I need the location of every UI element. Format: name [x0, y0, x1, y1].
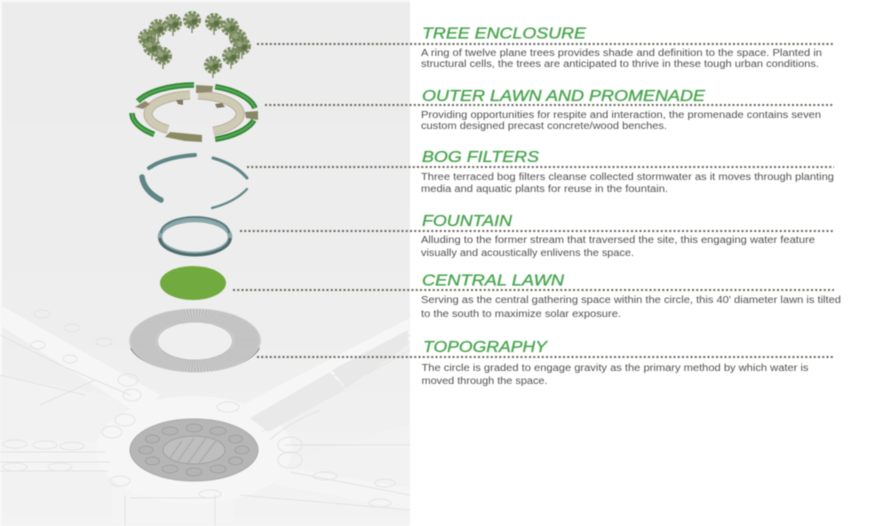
- text block: topography: The circle is graded to engage gravity as the primary method by which water is: [422, 363, 809, 374]
- icon: outer lawn and promenade: [132, 85, 258, 142]
- roads: [0, 305, 160, 415]
- text block: fountain: [421, 213, 816, 259]
- dotted leader: central lawn: [233, 289, 834, 291]
- icon: tree enclosure: [140, 13, 249, 78]
- text block: tree enclosure: [421, 26, 822, 70]
- heading: central lawn: CENTRAL LAWN: [422, 272, 564, 290]
- text block: outer lawn and promenade: Providing opportunities for respite and interaction, the promenade contains seven: [421, 110, 821, 121]
- text block: central lawn: [421, 272, 841, 320]
- text block: outer lawn and promenade: custom designed precast concrete/wood benches.: [421, 121, 667, 132]
- icon: topography ring: [129, 308, 261, 372]
- text block: central lawn: Serving as the central gathering space within the circle, this 40' diameter lawn is tilted: [421, 295, 841, 306]
- heading: fountain: FOUNTAIN: [422, 213, 512, 230]
- dotted leader: tree enclosure: [257, 43, 834, 45]
- heading: bog filters: BOG FILTERS: [422, 149, 539, 166]
- text block: outer lawn and promenade: [421, 88, 821, 132]
- text block: fountain: visually and acoustically enlivens the space.: [421, 248, 634, 259]
- icon: central lawn: [160, 266, 226, 300]
- dotted leader: fountain: [240, 230, 834, 232]
- text block: fountain: Alluding to the former stream that traversed the site, this engaging water feature: [421, 235, 816, 246]
- icon: fountain: [160, 217, 230, 255]
- text block: central lawn: to the south to maximize solar exposure.: [421, 309, 621, 320]
- heading: topography: TOPOGRAPHY: [423, 339, 548, 356]
- text block: topography: moved through the space.: [422, 376, 548, 387]
- text block: tree enclosure: A ring of twelve plane trees provides shade and definition to the space. Planted in: [421, 48, 822, 59]
- heading: outer lawn and promenade: OUTER LAWN AND PROMENADE: [422, 88, 705, 105]
- dotted leader: bog filters: [247, 166, 834, 168]
- plan linework: [0, 335, 410, 526]
- icon: bog filters: [142, 155, 247, 208]
- text block: topography: [422, 339, 809, 387]
- panel: site plan background: [0, 0, 410, 526]
- text block: bog filters: Three terraced bog filters cleanse collected stormwater as it moves through planting: [421, 172, 834, 183]
- dotted leader: topography: [257, 356, 834, 358]
- dotted leader: outer lawn: [265, 104, 834, 106]
- heading: tree enclosure: TREE ENCLOSURE: [422, 26, 586, 42]
- text block: bog filters: media and aquatic plants for reuse in the fountain.: [421, 184, 668, 195]
- text block: bog filters: [421, 149, 834, 195]
- text block: tree enclosure: structural cells, the trees are anticipated to thrive in these tough urban conditions.: [421, 59, 819, 70]
- icon: site plan circle: [130, 419, 258, 481]
